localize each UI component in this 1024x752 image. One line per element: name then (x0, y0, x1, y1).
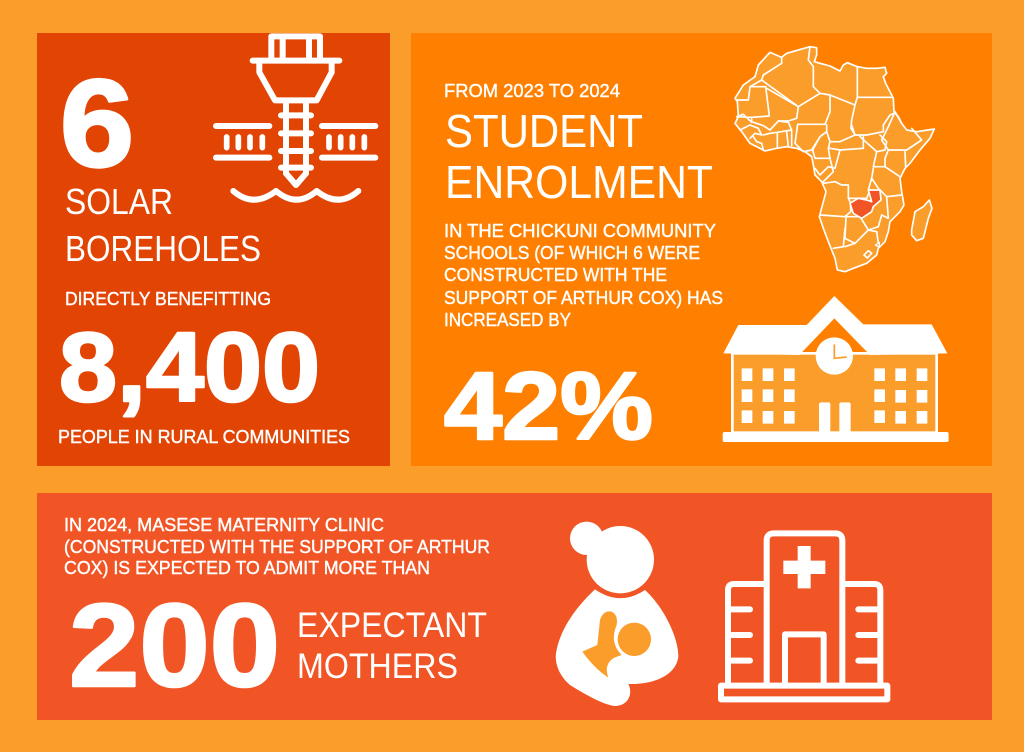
text: clinic description: (CONSTRUCTED WITH THE SUPPORT OF ARTHUR (64, 537, 490, 557)
heading: solar boreholes: SOLAR (65, 181, 173, 222)
heading: student enrolment: ENROLMENT (445, 156, 713, 208)
panel: student enrolment (411, 33, 992, 466)
text: enrolment description: CONSTRUCTED WITH THE (444, 265, 667, 285)
icon: school building (723, 296, 949, 442)
text: clinic description: COX) IS EXPECTED TO ADMIT MORE THAN (64, 558, 430, 578)
text: expectant mothers (297, 606, 487, 686)
panel: solar boreholes (37, 33, 390, 466)
icon: mother and baby (556, 522, 678, 706)
text: from 2023 to 2024: FROM 2023 TO 2024 (444, 81, 620, 101)
text: enrolment description: IN THE CHICKUNI COMMUNITY (444, 221, 716, 241)
text: enrolment description: INCREASED BY (444, 310, 571, 330)
text: people in rural communities: PEOPLE IN RURAL COMMUNITIES (58, 427, 350, 447)
text: enrolment description: SCHOOLS (OF WHICH 6 WERE (444, 243, 700, 263)
text: expectant mothers: MOTHERS (297, 647, 458, 686)
big number 200: 200 (69, 580, 280, 712)
big number 6: 6 (60, 55, 134, 193)
map: Africa with Zambia highlighted (735, 47, 934, 272)
icon: borehole drill (216, 36, 375, 200)
heading: student enrolment: STUDENT (445, 105, 643, 157)
panel: maternity clinic (37, 493, 992, 720)
text: clinic description: IN 2024, MASESE MATERNITY CLINIC (64, 515, 384, 535)
heading: solar boreholes: BOREHOLES (65, 228, 261, 269)
text: clinic description (64, 515, 490, 578)
text: enrolment description: SUPPORT OF ARTHUR COX) HAS (444, 288, 723, 308)
heading: solar boreholes (65, 181, 261, 269)
big number 8,400: 8,400 (59, 312, 320, 422)
icon: hospital building (721, 533, 887, 699)
heading: student enrolment (445, 105, 713, 208)
big number 42%: 42% (444, 353, 653, 460)
text: expectant mothers: EXPECTANT (297, 606, 487, 645)
text: enrolment description (444, 221, 723, 330)
text: directly benefitting: DIRECTLY BENEFITTING (65, 289, 271, 309)
